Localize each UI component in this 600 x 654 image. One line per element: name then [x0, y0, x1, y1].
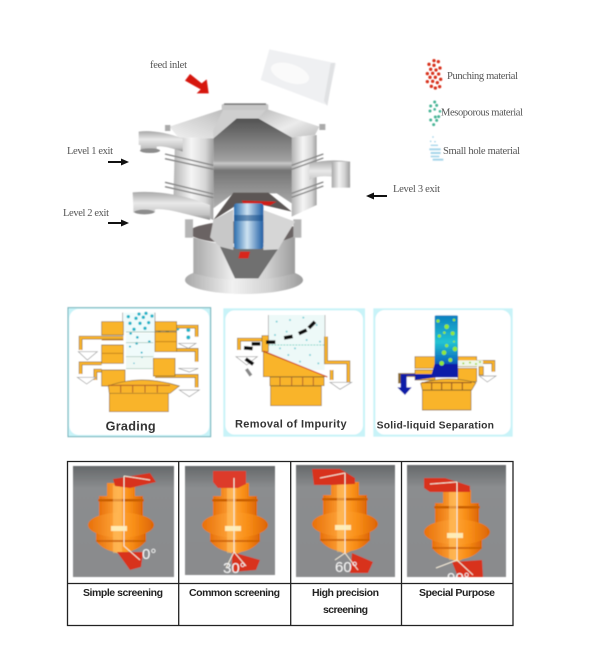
inner cone and motor	[210, 193, 295, 258]
machine base	[185, 219, 303, 294]
caption: removal of impurity: Removal of Impurity	[235, 419, 348, 431]
arrow: level 2 exit	[108, 220, 129, 226]
cell: common screening photo: 30°	[223, 560, 246, 577]
icon: green particles	[428, 100, 441, 126]
label: high precision screening: screening	[323, 604, 368, 616]
panel: grading	[68, 308, 211, 437]
label: level 1 exit: Level 1 exit	[67, 146, 113, 157]
cell: special purpose photo	[407, 465, 506, 587]
icon: red particles	[426, 59, 442, 90]
white filter bag	[261, 49, 336, 106]
machine body shells	[165, 135, 323, 220]
table grid	[68, 462, 513, 626]
red feed arrow	[185, 74, 209, 93]
legend: mesoporous material: Mesoporous material	[441, 108, 523, 118]
legend: punching material: Punching material	[447, 71, 518, 82]
cell: common screening photo	[185, 466, 275, 577]
label: level 2 exit: Level 2 exit	[63, 208, 109, 219]
icon: blue particles	[429, 136, 443, 161]
label: high precision screening: High precision	[312, 587, 379, 599]
cell: simple screening photo: 0°	[142, 546, 156, 563]
legend: small hole material: Small hole material	[443, 146, 520, 157]
label: common screening: Common screening	[189, 587, 280, 599]
caption: grading: Grading	[106, 419, 156, 433]
table: motor angle settings	[68, 462, 513, 626]
cell: high precision photo	[296, 465, 395, 577]
arrow: level 1 exit	[108, 158, 129, 166]
label: special purpose: Special Purpose	[419, 587, 495, 599]
level 2 outlet	[133, 192, 210, 220]
level 3 outlet	[309, 160, 350, 188]
panel: solid-liquid separation	[373, 308, 513, 437]
infographic: screening machine overview	[63, 50, 523, 626]
cell: simple screening photo	[73, 466, 174, 577]
label: level 3 exit: Level 3 exit	[393, 184, 440, 195]
label: feed inlet: feed inlet	[150, 60, 187, 71]
machine illustration	[133, 49, 350, 294]
outlets	[81, 327, 197, 387]
caption: solid-liquid separation: Solid-liquid Separation	[377, 421, 494, 432]
label: simple screening: Simple screening	[83, 587, 163, 599]
level 1 outlet	[139, 131, 183, 153]
cell: special purpose photo: 90°	[447, 570, 470, 587]
dome lid	[165, 103, 325, 138]
cutaway interior	[213, 118, 292, 208]
arrow: level 3 exit	[366, 192, 387, 200]
legend icons	[426, 59, 443, 161]
cell: high precision photo: 60°	[335, 559, 358, 576]
panel: removal of impurity	[223, 308, 365, 437]
